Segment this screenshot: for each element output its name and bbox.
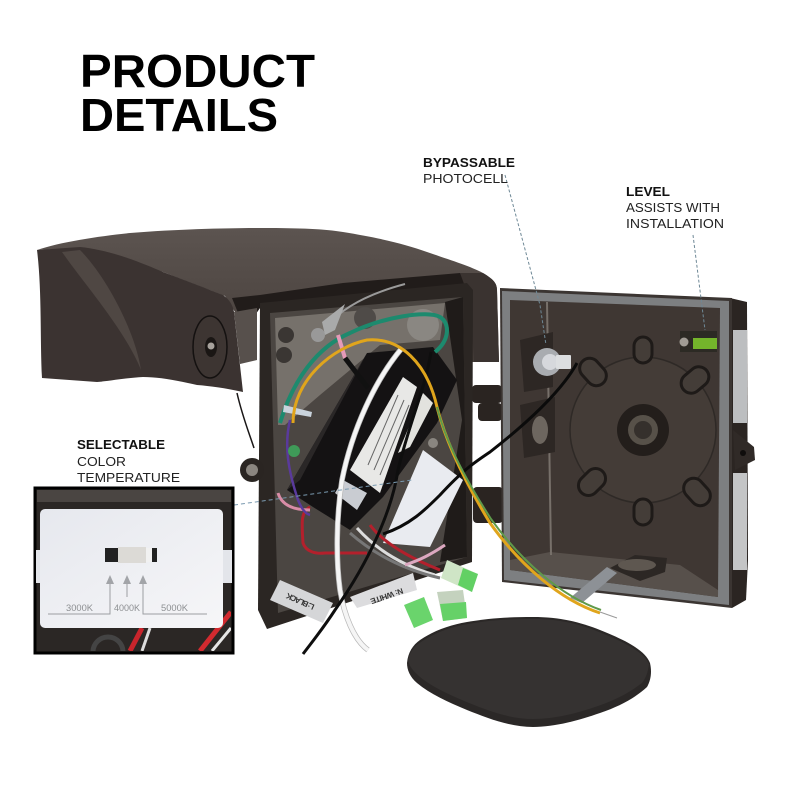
- driver box: [287, 347, 457, 530]
- slots: [574, 337, 714, 525]
- yellow and green lead: [293, 340, 617, 618]
- pink sleeve wire: [338, 335, 345, 358]
- side strip with spec labels: [730, 298, 755, 608]
- tag: L BLACK: L: BLACK: [285, 591, 316, 611]
- fixture lid: [37, 228, 499, 448]
- slide switch: [105, 547, 157, 563]
- small green terminal: [288, 445, 300, 457]
- green connectors: [404, 560, 478, 628]
- callout: level: INSTALLATION: [626, 216, 724, 231]
- mounting plate: [570, 357, 716, 503]
- black lead: [303, 352, 431, 654]
- temperature labels: 3000K: [66, 603, 94, 614]
- inset: color temperature switch: [35, 488, 233, 667]
- callout: selectable color temperature: [77, 437, 180, 485]
- cable tie: [283, 405, 312, 417]
- callout line: photocell: [505, 175, 546, 345]
- callout line: level: [693, 235, 705, 330]
- tag: L BLACK: [270, 580, 333, 623]
- box frame: [500, 288, 732, 608]
- white card: [383, 450, 463, 547]
- callout: bypassable photocell: PHOTOCELL: [423, 171, 508, 186]
- callout: level: LEVEL: [626, 184, 670, 199]
- lid side corner: [460, 273, 499, 362]
- foam gasket disc: [407, 617, 651, 727]
- white switch cover: [36, 509, 232, 628]
- temperature labels: 5000K: [161, 603, 189, 614]
- driver label: [350, 377, 417, 493]
- callout: bypassable photocell: BYPASSABLE: [423, 155, 515, 170]
- tag: N WHITE: N: WHITE: [369, 586, 404, 606]
- white lead: [337, 348, 402, 650]
- temperature labels: 4000K: [114, 603, 141, 614]
- photocell wire: [383, 363, 577, 534]
- open housing with driver and wiring: [240, 283, 478, 654]
- lid underside lip: [232, 273, 470, 330]
- center hub: [617, 404, 669, 456]
- title: DETAILS: [80, 89, 278, 141]
- grey wire tag: [570, 567, 617, 603]
- secondary label: [398, 393, 433, 453]
- pink wire: [278, 493, 310, 510]
- lid front face: [37, 247, 243, 392]
- open back box: [293, 288, 755, 618]
- callout: level: ASSISTS WITH: [626, 200, 720, 215]
- bottom boss: [610, 555, 667, 581]
- grey wire at top: [328, 284, 405, 325]
- title: PRODUCT: [80, 45, 315, 97]
- purple wire: [287, 420, 310, 515]
- hinges: [472, 385, 503, 523]
- callout: selectable color temperature: SELECTABLE: [77, 437, 165, 452]
- teal ground wire: [280, 314, 447, 423]
- callout: bypassable photocell: [423, 155, 515, 186]
- thin lead under lid: [237, 393, 254, 448]
- lid pivot hub: [193, 316, 227, 378]
- callout: level: [626, 184, 724, 231]
- photocell: [533, 348, 571, 376]
- left brackets: [520, 332, 555, 458]
- bubble level: [680, 331, 717, 352]
- screw posts: [276, 307, 439, 363]
- title: [80, 45, 315, 141]
- wires in inset: [90, 610, 231, 651]
- callout: selectable color temperature: TEMPERATURE: [77, 470, 180, 485]
- wire bundle to connectors: [350, 525, 445, 578]
- front face crease: [62, 250, 141, 370]
- lid bracket: [234, 308, 257, 364]
- housing frame: [258, 283, 473, 629]
- red wire: [302, 507, 367, 553]
- selector arrows: [106, 575, 147, 584]
- callout: selectable color temperature: COLOR: [77, 454, 126, 469]
- tag: N WHITE: [350, 573, 417, 608]
- infographic canvas: [34, 54, 755, 727]
- lid top surface: [37, 228, 499, 362]
- blue info label: [335, 480, 367, 510]
- temperature labels: [66, 603, 189, 614]
- side mount ear: [240, 458, 264, 482]
- callout line: color temperature: [234, 480, 412, 505]
